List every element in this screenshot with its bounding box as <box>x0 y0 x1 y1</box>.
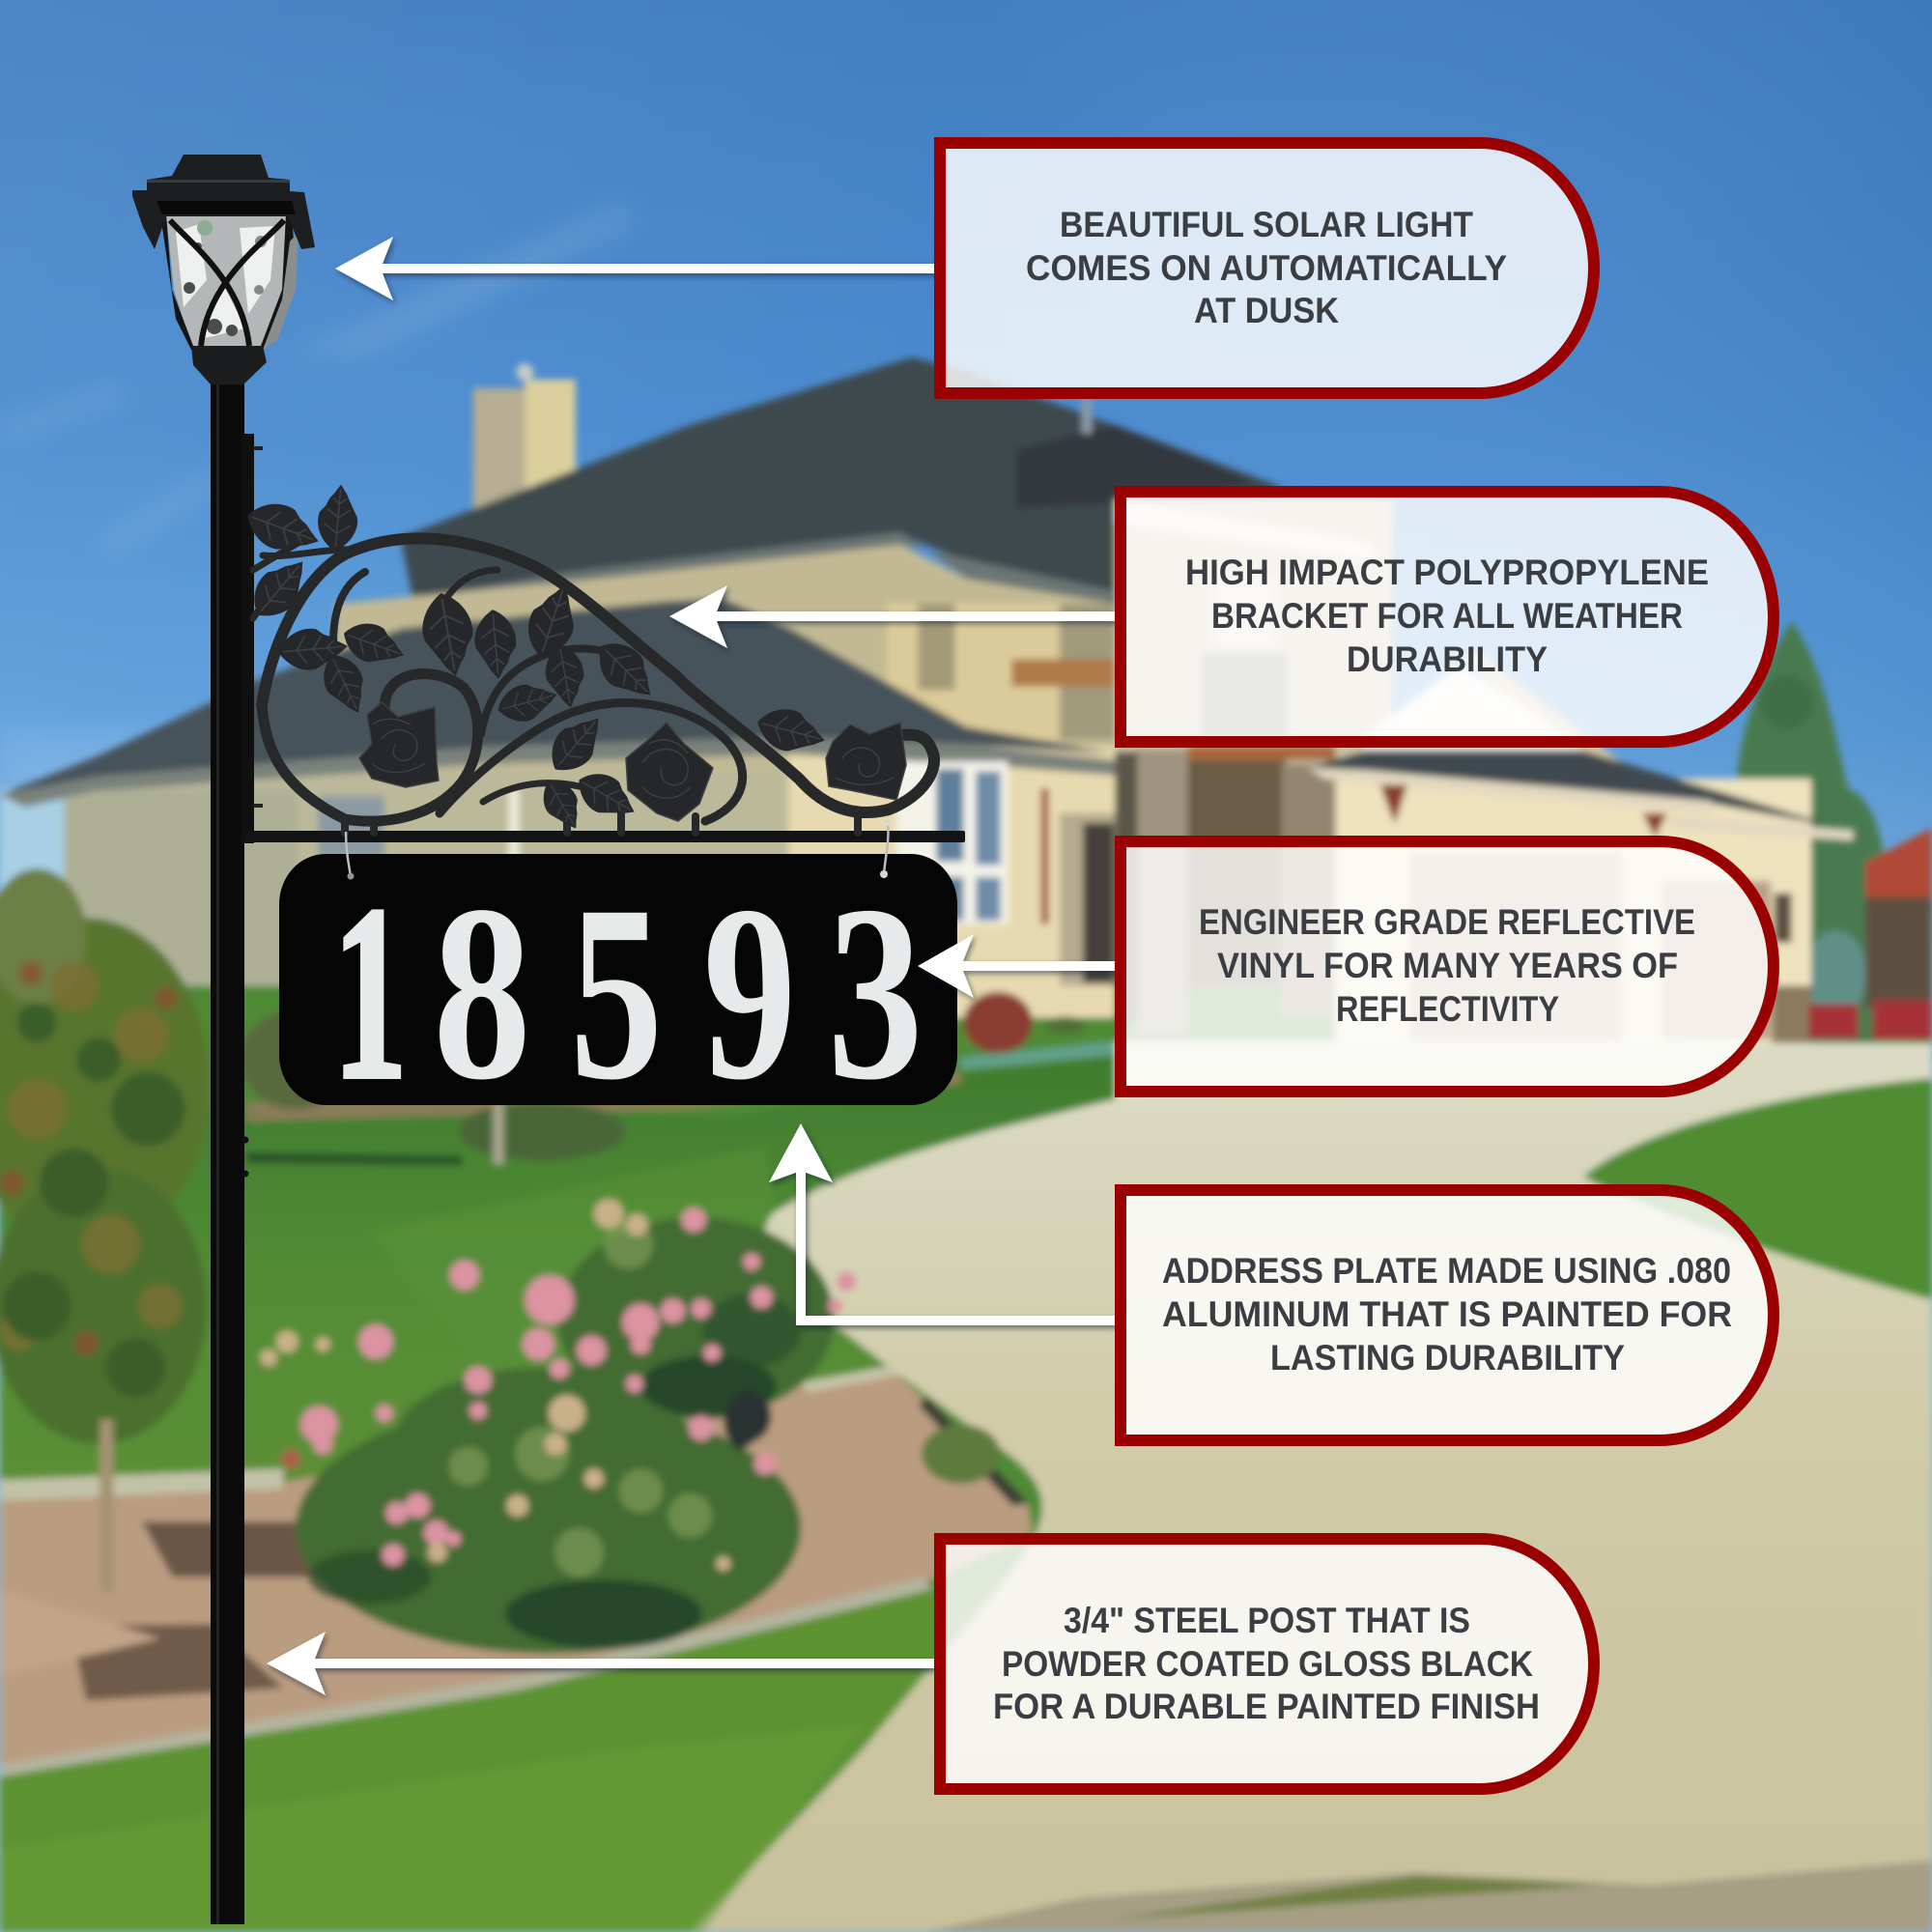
shrub behind <box>458 1101 626 1161</box>
hanging bar <box>245 831 965 842</box>
lower lawn <box>0 1571 1010 1932</box>
lower left roof <box>0 599 1115 801</box>
house number digits: 5 <box>570 854 663 1132</box>
house number digits: 1 <box>332 855 408 1132</box>
callout: address plate <box>1121 1190 1774 1440</box>
solar lantern <box>132 155 315 384</box>
callout: solar light: BEAUTIFUL SOLAR LIGHT <box>1060 205 1473 244</box>
right wing <box>1336 779 1811 1043</box>
arrow: bracket <box>669 585 1117 648</box>
sky clouds <box>0 203 640 801</box>
mid lawn <box>0 1056 1122 1491</box>
upper roof <box>401 357 1282 604</box>
callout: steel post: FOR A DURABLE PAINTED FINISH <box>993 1687 1540 1726</box>
callout: bracket: BRACKET FOR ALL WEATHER <box>1211 596 1683 636</box>
callout: steel post <box>940 1539 1594 1789</box>
front section <box>1115 499 1392 764</box>
house number digits: 3 <box>828 853 923 1131</box>
driveway <box>678 1041 1932 1932</box>
callout: bracket <box>1121 492 1774 742</box>
scrollwork <box>253 536 934 833</box>
left tree <box>0 868 210 1592</box>
callout: bracket: DURABILITY <box>1347 639 1548 679</box>
house number digits: 9 <box>703 854 796 1132</box>
lantern roof <box>132 155 315 249</box>
stone piers and porch <box>1188 754 1287 988</box>
far sky low left <box>0 788 74 974</box>
arrow: reflective vinyl <box>918 934 1117 998</box>
callout: bracket: HIGH IMPACT POLYPROPYLENE <box>1185 553 1709 592</box>
red shrubs <box>1808 1001 1932 1040</box>
house number digits: 8 <box>433 854 531 1132</box>
chimney <box>473 388 525 529</box>
callout: solar light: AT DUSK <box>1194 291 1339 330</box>
callout: solar light: COMES ON AUTOMATICALLY <box>1026 248 1507 288</box>
bed and mulch <box>0 1370 1033 1768</box>
upper walls <box>335 545 1115 788</box>
hooks <box>346 823 888 876</box>
ornate bracket <box>240 483 965 842</box>
arrow: address plate <box>769 1123 1117 1325</box>
callout: reflective vinyl: VINYL FOR MANY YEARS OF <box>1217 946 1678 985</box>
arrow: steel post <box>267 1632 936 1695</box>
callout: address plate: ADDRESS PLATE MADE USING .080 <box>1162 1251 1731 1291</box>
callout: reflective vinyl: ENGINEER GRADE REFLECTIVE <box>1199 902 1695 942</box>
left lower walls <box>64 770 791 980</box>
callout: steel post: POWDER COATED GLOSS BLACK <box>1002 1644 1533 1684</box>
steel post <box>211 383 263 1924</box>
far tree right <box>1737 621 1890 1043</box>
far ground base <box>0 974 1932 1932</box>
lantern base <box>191 346 267 384</box>
house number digits <box>332 853 923 1132</box>
address plate <box>279 820 957 1132</box>
callout: reflective vinyl: REFLECTIVITY <box>1336 989 1559 1029</box>
roses <box>359 702 906 821</box>
white gable <box>1355 666 1632 770</box>
leaves <box>240 483 830 837</box>
lantern glass <box>166 214 290 346</box>
lantern frame <box>160 214 294 350</box>
callout: reflective vinyl <box>1121 841 1774 1092</box>
callout: address plate: LASTING DURABILITY <box>1270 1338 1625 1378</box>
arrow: solar light <box>335 237 936 300</box>
big window <box>897 761 1008 924</box>
rose bush <box>296 1217 835 1654</box>
callout: steel post: 3/4" STEEL POST THAT IS <box>1064 1601 1470 1640</box>
callout: solar light <box>940 143 1594 393</box>
callout: address plate: ALUMINUM THAT IS PAINTED FOR <box>1162 1294 1732 1334</box>
